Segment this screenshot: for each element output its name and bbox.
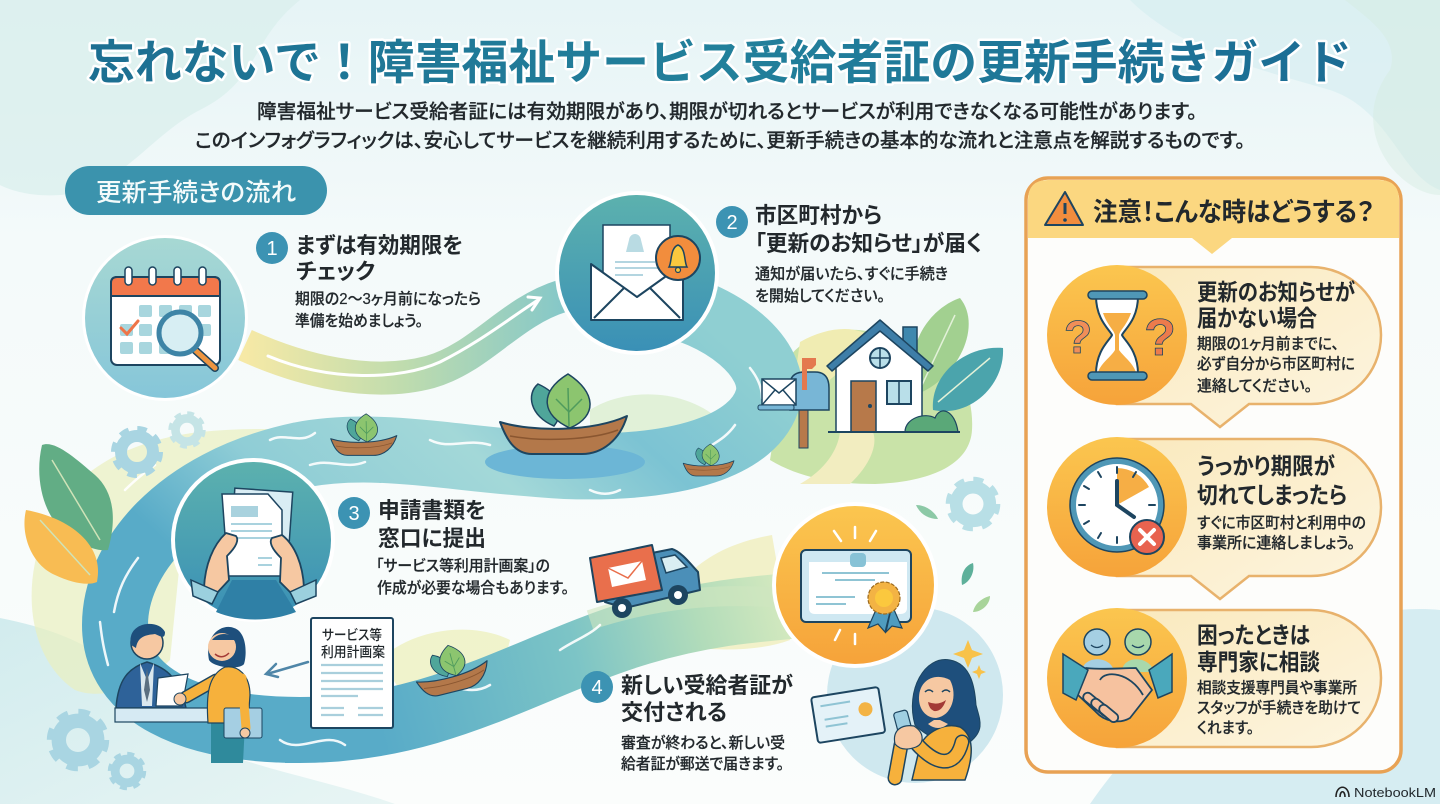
- card body: すぐに市区町村と利用中の: [1197, 514, 1366, 532]
- card: [811, 687, 885, 743]
- badge 4: [581, 671, 613, 703]
- intro text: [195, 101, 1245, 152]
- mailbox: [758, 358, 829, 448]
- badge 3: [338, 497, 370, 529]
- card heading: 届かない場合: [1197, 305, 1317, 331]
- card body: くれます。: [1197, 719, 1254, 737]
- description 2: を開始してください。: [755, 287, 885, 305]
- decorative hills behind the river: [32, 329, 972, 694]
- badge 1: [256, 232, 288, 264]
- card body: 必ず自分から市区町村に: [1197, 355, 1355, 373]
- badge 3: 3: [348, 503, 360, 525]
- panel header: [1028, 180, 1399, 254]
- panel title: 注意！こんな時はどうする？: [1093, 197, 1374, 227]
- description 4: 審査が終わると、新しい受: [621, 733, 785, 752]
- boat: right: [683, 444, 734, 476]
- house and mailbox: [758, 298, 1003, 448]
- card heading: うっかり期限が: [1197, 453, 1335, 479]
- badge 2: [716, 206, 748, 238]
- step 2 illustration: envelope and bell: [555, 191, 719, 355]
- step 2 text: [716, 203, 982, 305]
- boat: upper left: [331, 414, 397, 455]
- description 3: [376, 557, 569, 597]
- step 3 text: [338, 497, 569, 597]
- house: [827, 320, 960, 432]
- card body: 相談支援専門員や事業所: [1197, 679, 1357, 697]
- card heading: 切れてしまったら: [1197, 482, 1347, 508]
- card heading: 更新のお知らせが: [1197, 279, 1355, 305]
- badge 4: 4: [591, 677, 603, 699]
- card body: [1197, 514, 1366, 552]
- step 3 illustration: hands holding documents: [171, 458, 335, 622]
- heading 1: [296, 233, 463, 284]
- description 3: 作成が必要な場合もあります。: [377, 578, 569, 597]
- document: service use plan draft: サービス等: [322, 627, 382, 643]
- heading 4: 新しい受給者証が: [621, 673, 793, 698]
- step 4: truck: [590, 545, 700, 618]
- heading 4: 交付される: [621, 700, 727, 725]
- boats on the river: [331, 374, 734, 700]
- counter: [115, 708, 211, 722]
- description 2: 通知が届いたら、すぐに手続き: [755, 264, 948, 283]
- section heading: flow: 更新手続きの流れ: [96, 179, 296, 207]
- step 1 illustration: calendar and magnifier: [82, 235, 248, 401]
- card heading: [1197, 622, 1320, 675]
- river path: [100, 300, 800, 745]
- boat: lower: [410, 637, 492, 700]
- heading 3: 窓口に提出: [378, 526, 486, 551]
- intro text: このインフォグラフィックは、安心してサービスを継続利用するために、更新手続きの基本的な流れと注意点を解説するものです。: [195, 130, 1245, 152]
- icon: hourglass: ?: [1064, 311, 1092, 363]
- sparkles: [953, 640, 986, 679]
- description 2: [755, 264, 948, 305]
- icon: warning triangle: [1045, 192, 1083, 225]
- card body: 事業所に連絡しましょう。: [1197, 534, 1355, 552]
- left leaves: [24, 444, 113, 584]
- description 3: 「サービス等利用計画案」の: [376, 557, 550, 575]
- heading 4: [621, 673, 793, 725]
- boat: large: [500, 374, 627, 454]
- card heading: [1197, 453, 1347, 508]
- gears: [52, 414, 996, 787]
- description 4: 給者証が郵送で届きます。: [621, 754, 784, 773]
- card: deadline expired: [1047, 437, 1381, 599]
- badge 2: 2: [726, 212, 738, 234]
- panel: caution: [1026, 178, 1401, 772]
- title: 忘れないで！障害福祉サービス受給者証の更新手続きガイド: [88, 36, 1352, 89]
- description 1: [295, 290, 481, 330]
- watermark: NotebookLM: NotebookLM: [1354, 785, 1436, 800]
- card heading: 困ったときは: [1197, 622, 1310, 648]
- applicant: [174, 627, 262, 763]
- staff and applicant at counter: [115, 624, 262, 763]
- step 4 illustration: certificate: [772, 502, 938, 668]
- intro text: 障害福祉サービス受給者証には有効期限があり、期限が切れるとサービスが利用できなくなる可能性があります。: [257, 101, 1197, 123]
- icon: handshake with people: [1063, 629, 1172, 724]
- card: consult an expert: [1047, 608, 1381, 748]
- heading 1: チェック: [296, 259, 375, 284]
- description 1: 準備を始めましょう。: [295, 312, 423, 330]
- card body: 連絡してください。: [1197, 377, 1312, 395]
- icon: clock with cross: [1070, 458, 1164, 554]
- step 4 illustration: person with new card: [811, 607, 1003, 783]
- card heading: 専門家に相談: [1197, 649, 1320, 675]
- arrow stream from step 1 to step 2: [245, 296, 562, 378]
- icon: hourglass: ?: [1144, 309, 1176, 367]
- description 4: [621, 733, 785, 773]
- step 4 text: [581, 671, 793, 773]
- card: notice not received: [1047, 265, 1381, 427]
- document: service use plan draft: 利用計画案: [321, 644, 385, 660]
- icon: hourglass: [1064, 291, 1176, 380]
- heading 1: まずは有効期限を: [296, 233, 463, 258]
- card body: [1197, 335, 1355, 395]
- card body: [1197, 679, 1361, 737]
- small leaves: [916, 505, 990, 612]
- badge 1: 1: [266, 238, 278, 260]
- description 1: 期限の2〜3ヶ月前になったら: [295, 290, 481, 308]
- step 1 text: [256, 232, 481, 330]
- leaves behind house: [913, 298, 1003, 411]
- heading 2: 市区町村から: [755, 203, 882, 228]
- card body: 期限の1ヶ月前までに、: [1197, 335, 1339, 353]
- document: service use plan draft: [311, 618, 393, 728]
- card heading: [1197, 279, 1355, 331]
- arrow: document to counter: [266, 662, 308, 677]
- heading 3: [378, 498, 486, 551]
- staff member: [116, 624, 188, 708]
- section heading: flow: [65, 166, 327, 215]
- card body: スタッフが手続きを助けて: [1197, 698, 1361, 717]
- heading 2: [755, 203, 982, 256]
- heading 3: 申請書類を: [378, 498, 486, 523]
- heading 2: 「更新のお知らせ」が届く: [755, 231, 982, 256]
